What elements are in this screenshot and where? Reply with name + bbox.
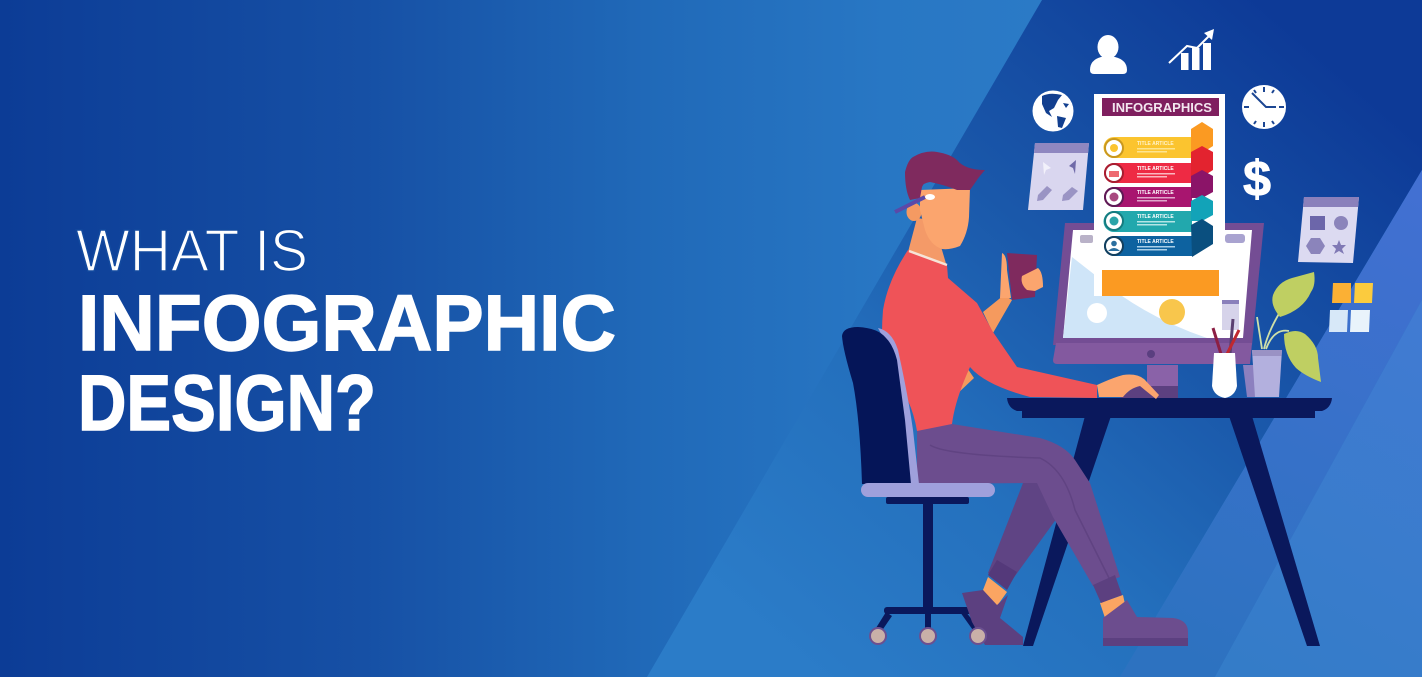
background: diagonal dark panel bbox=[647, 0, 1422, 677]
torso skin gap bbox=[950, 362, 974, 396]
chair seat bbox=[861, 483, 995, 497]
sticky squares bbox=[1329, 283, 1373, 332]
keyboard bbox=[1120, 386, 1178, 398]
poster step: teal: TITLE ARTICLE bbox=[1137, 214, 1174, 220]
poster step: yellow: TITLE ARTICLE bbox=[1137, 141, 1174, 147]
desk left leg bbox=[1023, 416, 1111, 646]
poster step: magenta bbox=[1104, 170, 1213, 207]
poster step: yellow bbox=[1104, 122, 1213, 158]
face bbox=[920, 188, 970, 249]
back cuff bbox=[988, 560, 1017, 590]
panel: shapes card bbox=[1298, 197, 1359, 263]
poster heading: INFOGRAPHICS bbox=[1112, 100, 1212, 115]
sweater bbox=[882, 250, 1097, 431]
plant bbox=[1243, 272, 1321, 397]
poster step: blue: TITLE ARTICLE bbox=[1137, 239, 1174, 245]
monitor bbox=[1053, 223, 1264, 398]
cup bbox=[1007, 253, 1037, 300]
poster step: red bbox=[1104, 146, 1213, 183]
icon: growth chart bbox=[1169, 29, 1214, 70]
plant leaves bbox=[1272, 272, 1321, 382]
icon: clock bbox=[1242, 85, 1286, 129]
monitor stand bbox=[1147, 365, 1178, 398]
poster step: magenta: TITLE ARTICLE bbox=[1137, 190, 1174, 196]
collar bbox=[909, 251, 947, 265]
background: middle diagonal band bbox=[1120, 170, 1422, 677]
plant stems bbox=[1257, 312, 1289, 349]
poster step: blue bbox=[1104, 219, 1213, 257]
background: right diagonal band bbox=[1215, 300, 1422, 677]
poster step: teal bbox=[1104, 195, 1213, 232]
desk top bbox=[1007, 398, 1332, 418]
front shoe sole bbox=[1103, 638, 1188, 646]
infographic poster bbox=[1094, 94, 1225, 296]
icon: dollar sign: $ bbox=[1243, 151, 1271, 207]
glasses bbox=[895, 194, 935, 212]
monitor frame bbox=[1053, 223, 1264, 345]
hand on keyboard bbox=[1097, 375, 1159, 399]
title line: what is: WHAT IS bbox=[76, 218, 308, 284]
chair back bbox=[842, 327, 911, 484]
fingers bbox=[1022, 268, 1043, 291]
poster orange bar bbox=[1102, 270, 1219, 296]
title line: infographic: INFOGRAPHIC bbox=[78, 278, 616, 367]
ear bbox=[906, 203, 922, 221]
monitor screen bbox=[1063, 230, 1252, 338]
poster sheet bbox=[1094, 94, 1225, 296]
forearm holding cup bbox=[983, 295, 1012, 333]
monitor chin bbox=[1053, 343, 1252, 364]
icon: globe bbox=[1032, 90, 1074, 132]
plant pot bbox=[1243, 350, 1282, 397]
panel: tool card bbox=[1028, 143, 1089, 210]
title bbox=[76, 218, 616, 447]
icon: person bbox=[1090, 35, 1127, 74]
poster step: red: TITLE ARTICLE bbox=[1137, 166, 1174, 172]
chair wheels bbox=[870, 628, 986, 644]
hair bbox=[905, 152, 985, 200]
desk right leg bbox=[1229, 416, 1320, 646]
back trouser leg bbox=[988, 483, 1070, 587]
back shoe bbox=[962, 590, 1023, 645]
front shoe bbox=[1103, 600, 1188, 646]
front sock bbox=[1100, 595, 1128, 618]
thumb bbox=[1000, 253, 1011, 298]
front cuff bbox=[1093, 575, 1122, 603]
trouser fold bbox=[930, 445, 1110, 580]
trousers bbox=[917, 424, 1120, 586]
chair back edge bbox=[878, 328, 919, 484]
pen holder bbox=[1212, 319, 1239, 398]
desk bbox=[1007, 398, 1332, 646]
person bbox=[882, 152, 1188, 646]
title line: design: DESIGN? bbox=[78, 358, 376, 447]
neck bbox=[908, 218, 947, 267]
chair base bbox=[876, 497, 980, 633]
back sock bbox=[983, 577, 1007, 606]
